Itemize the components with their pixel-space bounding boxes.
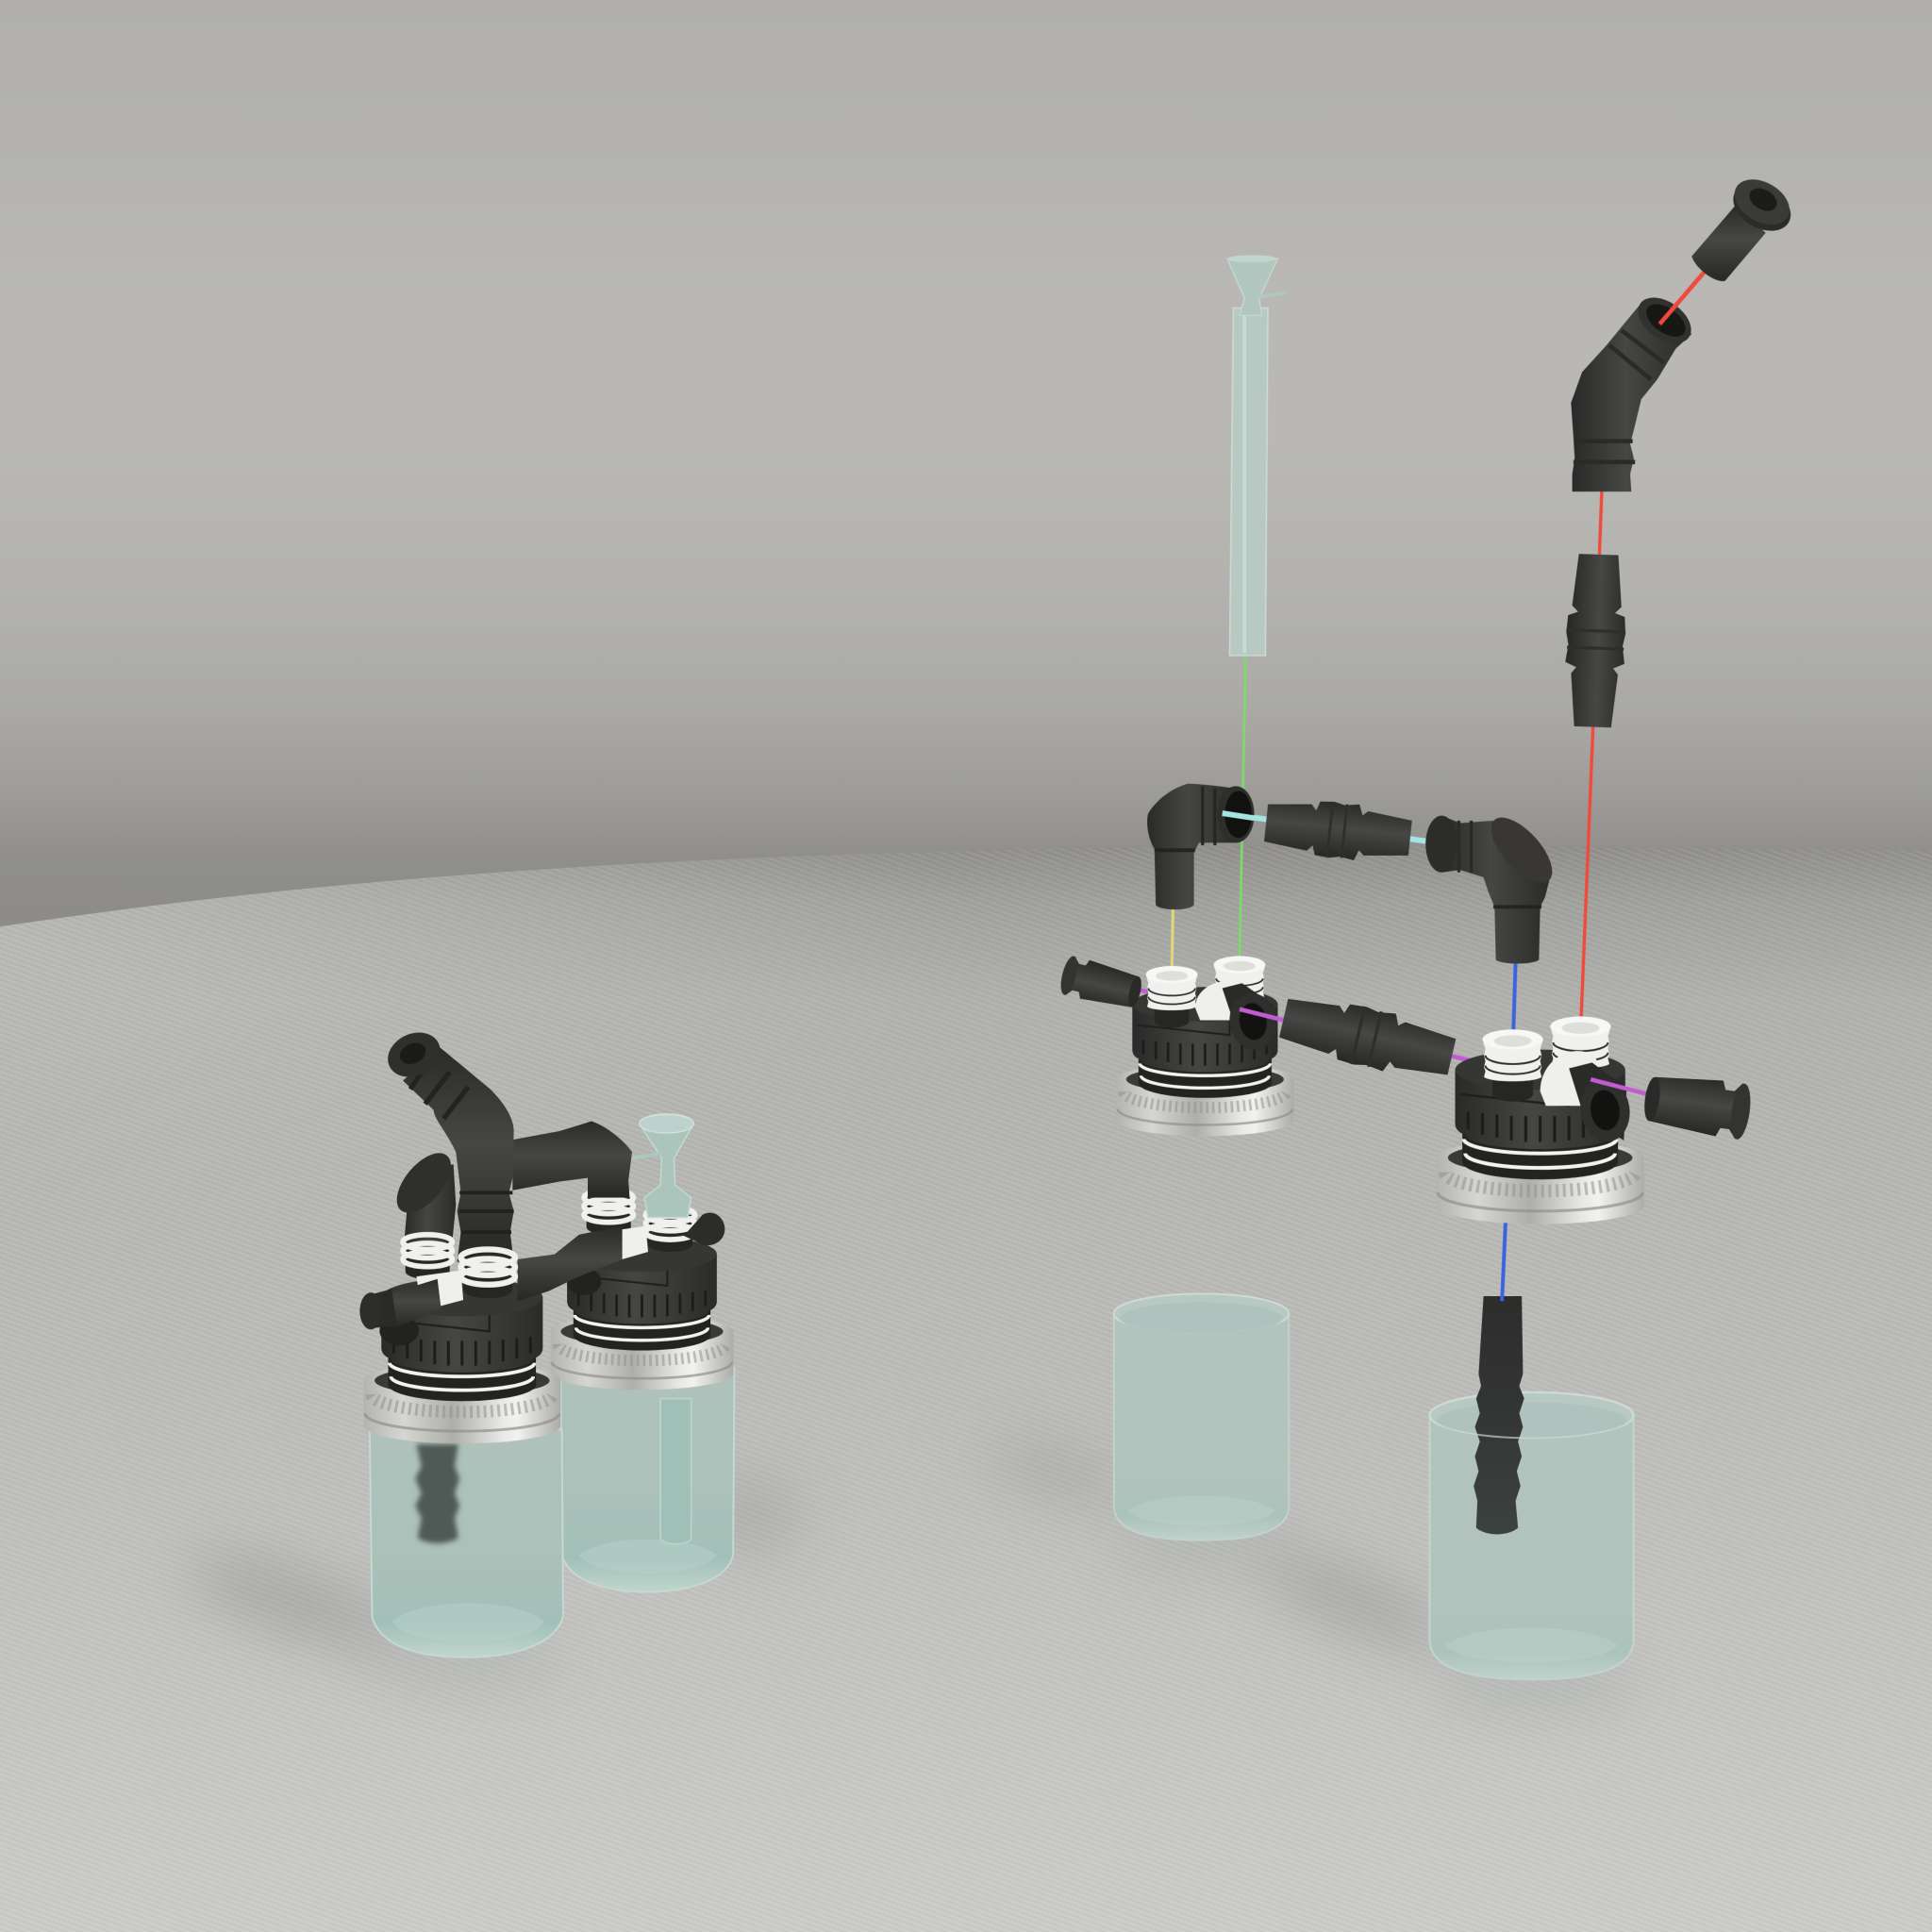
assembled unit: back lid: [551, 1236, 733, 1390]
assembled unit: front jar: [370, 1429, 563, 1657]
guide line: red middle: [1599, 491, 1602, 557]
assembled: rear rings and neck: [645, 1208, 695, 1252]
assembled: rear white bridge: [620, 1226, 648, 1259]
assembled: bowl funnel and glass adapter: [631, 1114, 693, 1217]
back neck rings lid 1: [1214, 957, 1265, 1018]
side port lid 2: [1569, 1062, 1634, 1145]
background wall: [0, 0, 1932, 986]
guide line: red lower: [1581, 724, 1593, 1025]
assembled: front neck rings: [460, 1249, 515, 1298]
back neck rings lid 2: [1550, 1016, 1611, 1089]
right elbow: [1425, 808, 1562, 963]
background floor: [0, 838, 1932, 1932]
assembled unit: front lid: [363, 1278, 560, 1443]
soft floor shadows: [181, 1432, 1630, 1697]
left end plug: [1058, 955, 1145, 1012]
assembled: upper horizontal elbow: [512, 1122, 632, 1198]
jar exploded 1: [1114, 1293, 1289, 1541]
white bridge lid 2: [1541, 1051, 1598, 1106]
side port lid 1: [1223, 983, 1280, 1053]
red elbow: [1571, 289, 1699, 491]
front neck rings lid 1: [1146, 966, 1198, 1027]
guide line: green: [1240, 653, 1245, 958]
jar exploded 2: [1429, 1392, 1634, 1679]
ribbed tube seen through front jar: [415, 1444, 459, 1543]
assembled: front horizontal pipe and plug: [359, 1271, 463, 1345]
long coupler on magenta axis: [1277, 990, 1458, 1086]
left elbow: [1147, 784, 1255, 909]
assembled: left neck rings: [403, 1235, 452, 1279]
assembled: red-axis elbow mouthpiece: [380, 1024, 514, 1261]
assembled: rear end plug: [684, 1212, 724, 1245]
guide line: yellow: [1172, 907, 1173, 974]
ribbed downstem in jar 2: [1474, 1296, 1524, 1534]
front neck rings lid 2: [1483, 1029, 1543, 1102]
assembled: slanted left elbow: [387, 1143, 461, 1242]
guide line: blue upper: [1513, 963, 1516, 1041]
glass downstem and bowl: [1227, 255, 1287, 656]
short coupler on cyan axis: [1263, 795, 1413, 866]
guide line: magenta middle: [1441, 1054, 1476, 1062]
guide line: magenta through port 1: [1240, 1009, 1284, 1020]
assembled: long coupler across lids: [518, 1226, 623, 1301]
guide line: blue lower: [1502, 1220, 1506, 1301]
jar 2 front rim overlay: [1430, 1416, 1634, 1438]
vertical coupler on red axis: [1563, 554, 1628, 728]
exploded lid 1: [1116, 957, 1293, 1136]
guide line: magenta left: [1119, 986, 1148, 991]
exploded lid 2: [1437, 1016, 1644, 1224]
guide line: red upper: [1659, 273, 1704, 325]
glass downstem in back jar: [660, 1398, 691, 1544]
top mouthpiece cap: [1691, 170, 1799, 281]
assembled: back neck rings: [584, 1191, 633, 1235]
guide line: magenta through port 2: [1591, 1079, 1657, 1096]
guide line: cyan: [1223, 813, 1429, 841]
assembled unit: back jar: [560, 1368, 734, 1592]
right end plug: [1641, 1070, 1754, 1141]
white bridge lid 1: [1195, 981, 1247, 1020]
